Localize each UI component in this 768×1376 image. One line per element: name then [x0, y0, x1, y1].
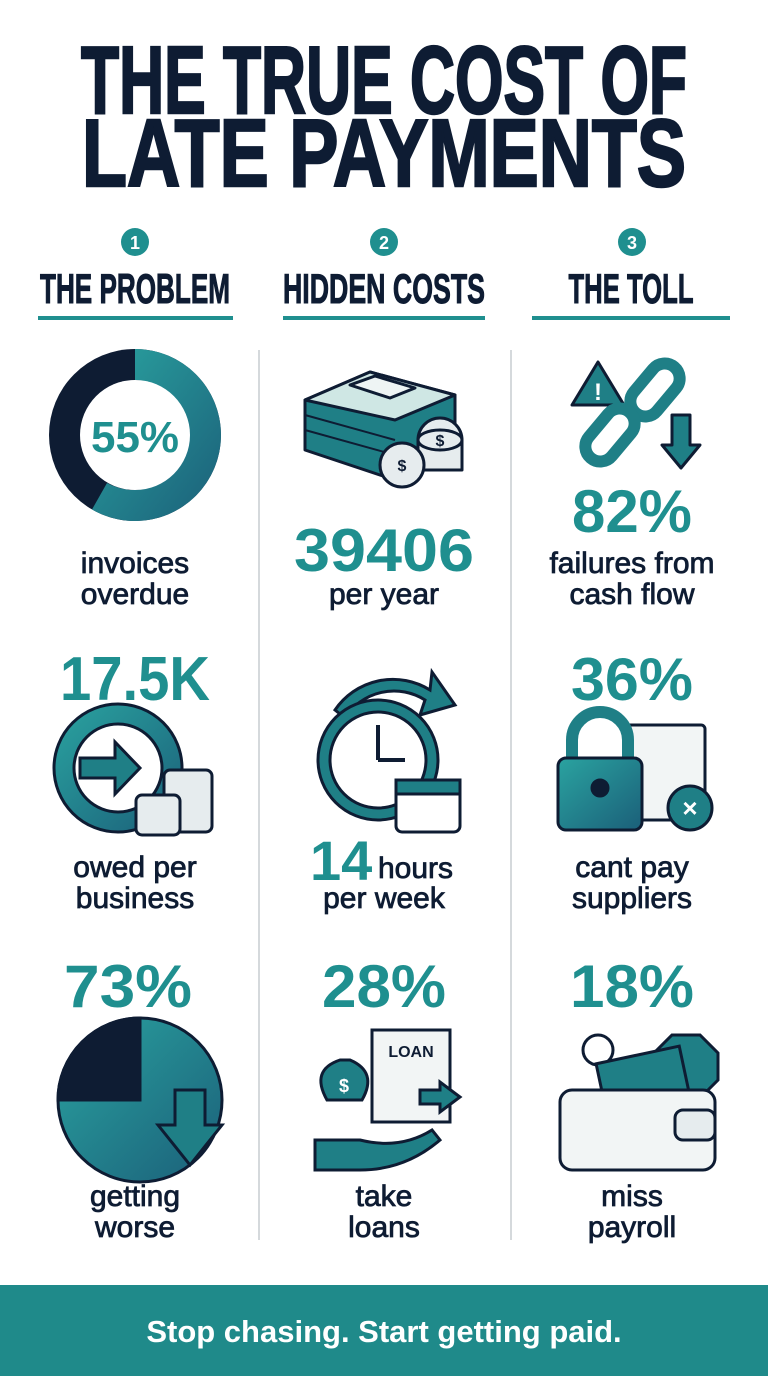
icon: lock and document: [558, 712, 712, 830]
heading: the problem: THE PROBLEM: [40, 265, 230, 312]
text: take loans: loans: [348, 1211, 420, 1244]
text: owed per business: business: [76, 882, 194, 915]
text: 14 hours per week: [310, 829, 453, 915]
text: 73%: 73%: [64, 953, 192, 1020]
text: cant pay suppliers: suppliers: [572, 882, 692, 915]
money icon: [305, 372, 462, 487]
text: !: [594, 379, 602, 406]
footer banner: Stop chasing. Start getting paid.: [146, 1314, 622, 1349]
text: owed per business: owed per: [73, 851, 197, 884]
text: invoices overdue: invoices: [81, 547, 189, 580]
text: 82% failures from cash flow: failures from: [549, 547, 715, 580]
text: 14 hours per week: 14: [310, 829, 372, 892]
heading: the toll: [532, 228, 730, 320]
text: cant pay suppliers: [572, 851, 692, 915]
clock icon: [318, 672, 460, 832]
text: $: [398, 458, 407, 475]
text: getting worse: getting: [90, 1180, 180, 1213]
text: miss payroll: [588, 1180, 676, 1244]
heading: the toll: THE TOLL: [568, 265, 694, 312]
footer banner: [0, 1285, 768, 1376]
text: 28%: 28%: [322, 953, 446, 1020]
heading: the problem: 1: [130, 233, 140, 253]
text: 36%: 36%: [571, 646, 693, 713]
heading: hidden costs: HIDDEN COSTS: [283, 265, 485, 312]
text: 14 hours per week: hours: [378, 852, 453, 885]
icon: arrow circle and coins: [54, 704, 212, 835]
text: owed per business: [73, 851, 197, 915]
heading: the problem: [38, 228, 233, 320]
icon: loan: [315, 1030, 460, 1170]
number 39406 per year: [294, 517, 474, 611]
pie chart icon: [58, 1018, 222, 1182]
text: 82% failures from cash flow: 82%: [572, 478, 692, 545]
text: getting worse: worse: [94, 1211, 175, 1244]
text: 17.5K: 17.5K: [60, 645, 210, 714]
text: $: [339, 1076, 349, 1096]
number 39406 per year: 39406: [294, 517, 474, 584]
text: miss payroll: miss: [601, 1180, 663, 1213]
donut chart 55%: 55%: [91, 413, 179, 462]
text: ×: [682, 793, 698, 823]
text: getting worse: [90, 1180, 180, 1244]
donut chart 55%: [49, 349, 221, 521]
text: LOAN: [388, 1044, 434, 1061]
heading: hidden costs: [283, 228, 485, 320]
heading: the toll: 3: [627, 233, 637, 253]
chain icon: [572, 357, 700, 468]
icon: wallet: [560, 1035, 718, 1170]
text: miss payroll: payroll: [588, 1211, 676, 1244]
text: invoices overdue: overdue: [81, 578, 189, 611]
text: 18%: 18%: [570, 953, 694, 1020]
text: $: [436, 433, 445, 450]
text: take loans: take: [356, 1180, 412, 1213]
text: 82% failures from cash flow: [549, 478, 715, 611]
heading: hidden costs: 2: [379, 233, 389, 253]
text: 82% failures from cash flow: cash flow: [569, 578, 695, 611]
text: invoices overdue: [81, 547, 189, 611]
text: cant pay suppliers: cant pay: [575, 851, 689, 884]
number 39406 per year: per year: [329, 578, 439, 611]
title: [81, 27, 687, 207]
text: take loans: [348, 1180, 420, 1244]
text: 14 hours per week: per week: [323, 882, 446, 915]
